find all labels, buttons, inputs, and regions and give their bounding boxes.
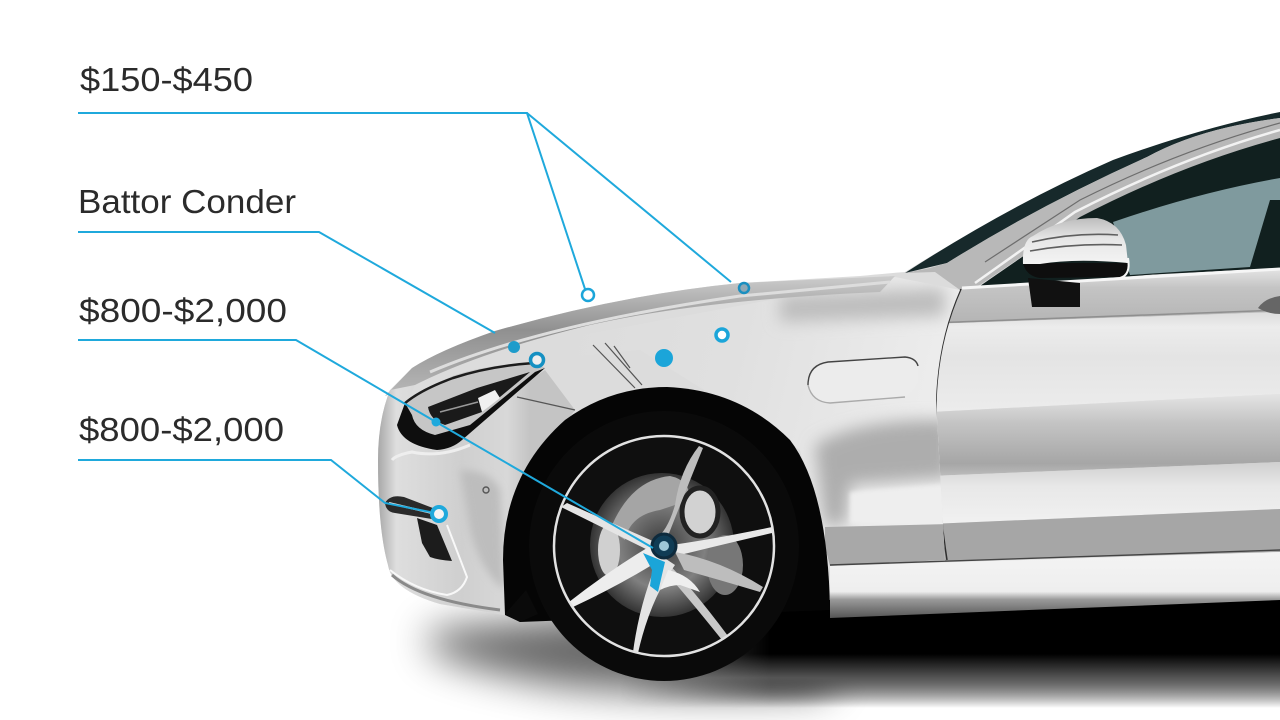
fender shading	[780, 288, 950, 570]
chrome fog strip	[385, 496, 438, 520]
fender upper shade	[780, 288, 945, 322]
spokes	[561, 503, 664, 552]
lens	[397, 362, 545, 450]
mirror stem	[1028, 278, 1080, 307]
body silhouette	[378, 113, 1280, 616]
window glass	[1113, 178, 1280, 275]
ground shadow	[430, 595, 1280, 708]
marker: hood edge	[739, 283, 749, 293]
front bumper	[378, 370, 575, 615]
marker: fender	[655, 349, 673, 367]
marker dots	[432, 283, 749, 521]
marker: hood top	[582, 289, 594, 301]
mirror cap	[1023, 218, 1128, 264]
label: $150-$450: $150-$450	[80, 61, 253, 98]
mudflap	[505, 590, 538, 622]
door lower band	[943, 509, 1280, 560]
headlight	[397, 362, 545, 450]
blue spoke accent	[643, 553, 665, 592]
projector unit	[428, 372, 530, 425]
car body	[378, 112, 1280, 622]
wheel arch	[503, 387, 830, 622]
rim inner	[554, 436, 774, 656]
door upper band	[930, 268, 1280, 324]
fender lower highlight	[848, 486, 943, 524]
side mirror	[1023, 218, 1129, 307]
roof dark strip	[905, 112, 1280, 273]
side window	[980, 138, 1280, 286]
hood	[385, 276, 895, 396]
hood crease lines	[517, 343, 642, 410]
sill	[830, 552, 1280, 618]
front wheel	[529, 411, 799, 681]
label: Battor Conder: Battor Conder	[78, 183, 296, 220]
A-pillar	[905, 118, 1280, 290]
door handle	[1258, 296, 1280, 314]
fender panel	[500, 277, 960, 566]
marker: hood crease	[508, 341, 520, 353]
bumper sensor	[483, 487, 489, 493]
label: $800-$2,000 lower: $800-$2,000	[79, 411, 284, 448]
bumper lower curve	[390, 525, 467, 595]
rim ring	[554, 436, 774, 656]
lower air intake	[417, 518, 452, 561]
line: third callout	[78, 340, 653, 548]
brake disc	[590, 473, 734, 617]
door shaded belt	[937, 408, 1280, 476]
fuel door	[808, 357, 918, 403]
door main highlight	[930, 312, 1280, 412]
line: fourth callout	[78, 460, 430, 512]
door lower highlight	[930, 462, 1280, 524]
marker: fog light	[432, 507, 446, 521]
lens lower black	[397, 368, 545, 450]
line: second callout	[78, 232, 495, 333]
lens upper line	[404, 363, 534, 404]
marker: fender upper	[716, 329, 728, 341]
hub	[652, 534, 676, 558]
fender lower band	[825, 524, 945, 566]
mirror lower band	[1023, 263, 1128, 278]
line group: top callout	[78, 113, 731, 289]
marker: headlight corner	[530, 354, 544, 366]
fender shaded belt	[815, 420, 950, 525]
tyre	[529, 411, 799, 681]
label: $800-$2,000 upper: $800-$2,000	[79, 292, 287, 329]
door panel	[930, 268, 1280, 565]
callout lines	[78, 113, 731, 548]
marker: headlight	[432, 418, 440, 426]
door seam	[936, 289, 961, 560]
